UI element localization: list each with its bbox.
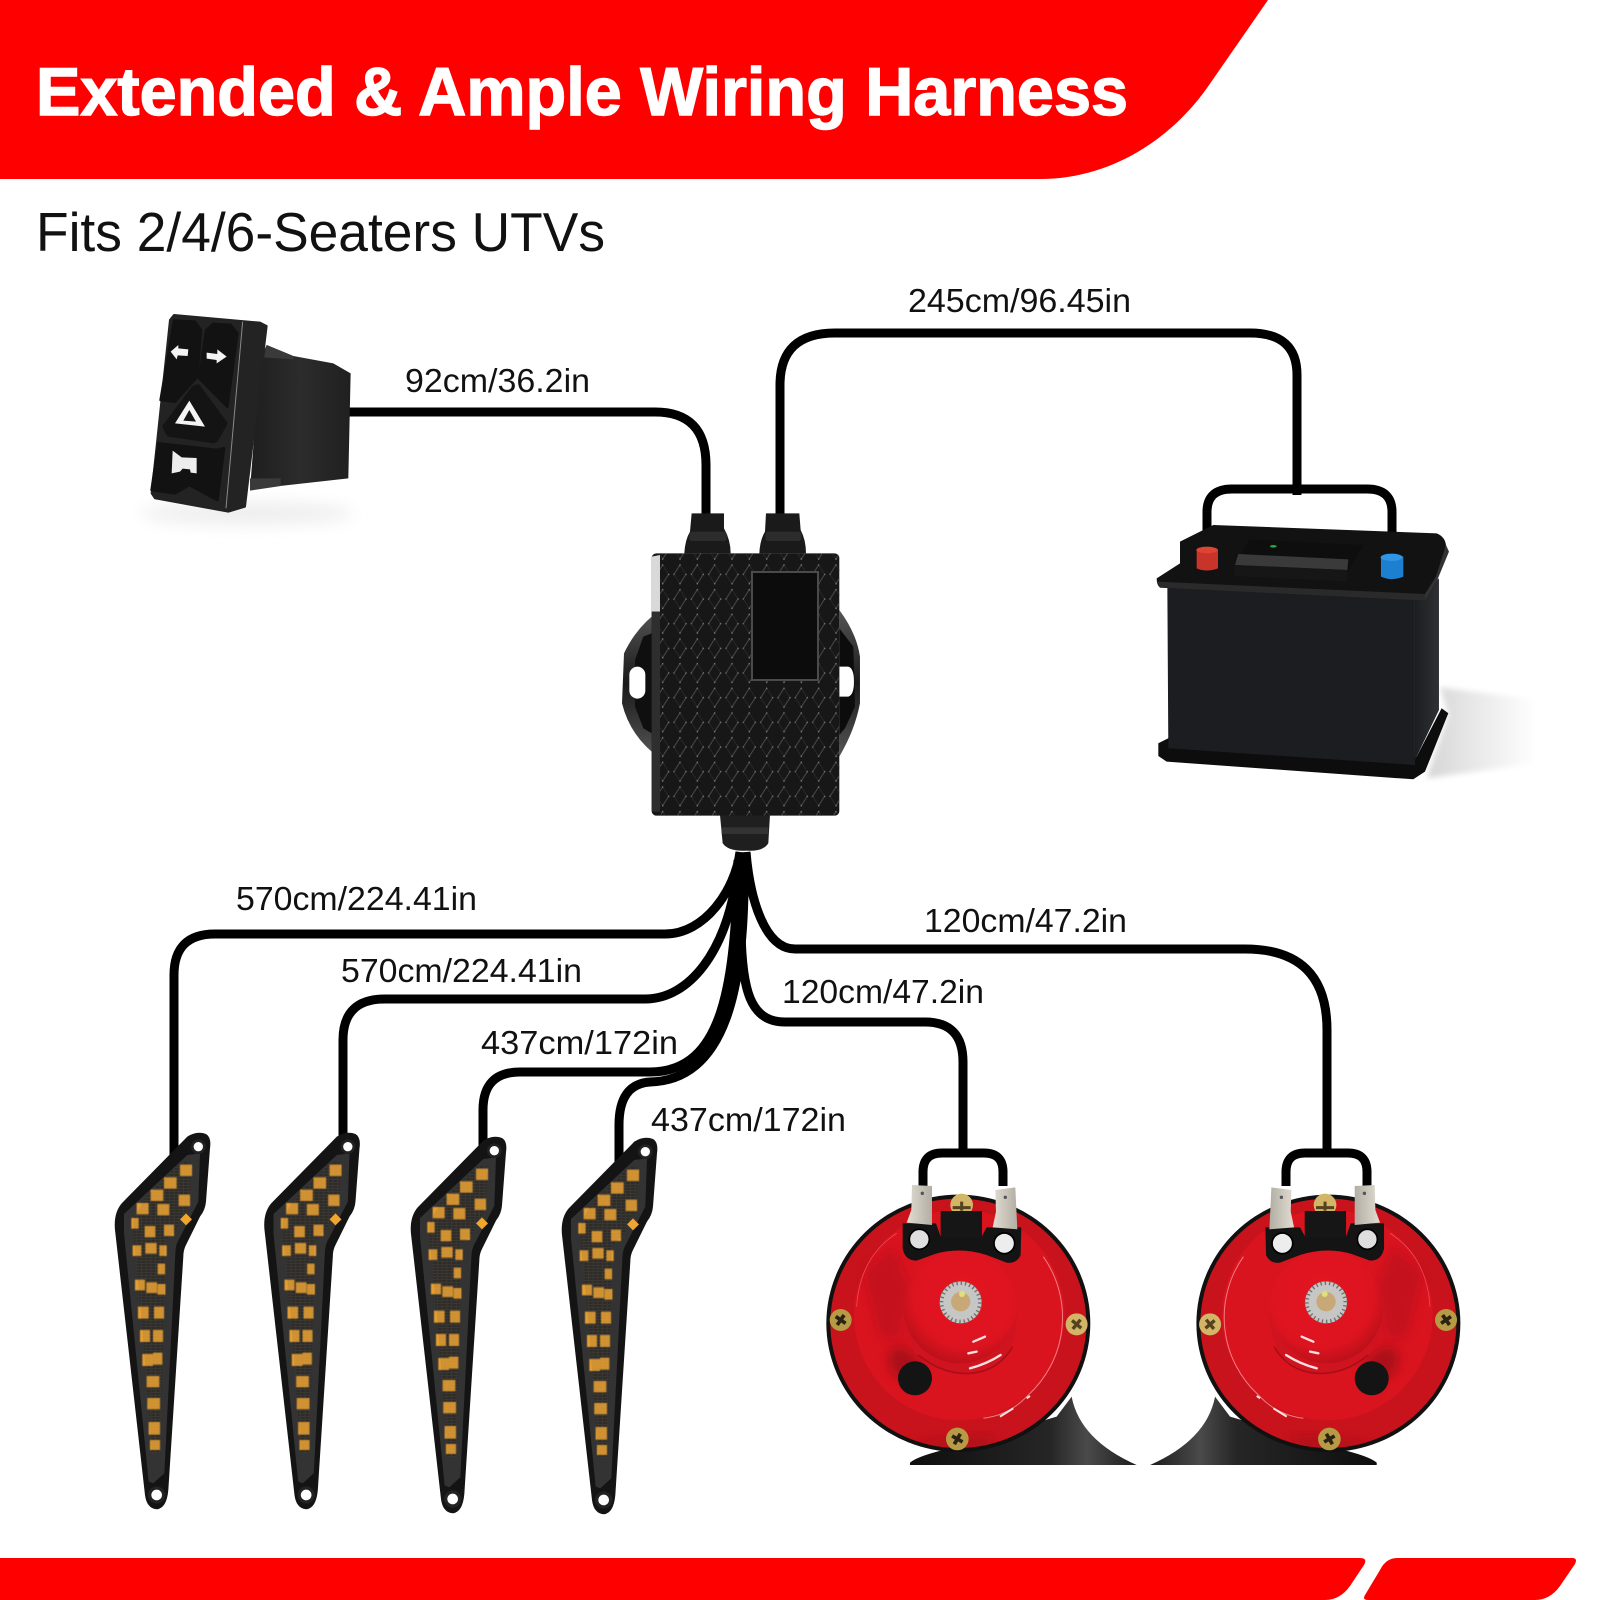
icon: light 1 [115,1133,210,1509]
wire: light 1 [174,852,740,1155]
wire: controller to battery [780,333,1297,525]
icon: horn 1 [826,1185,1137,1465]
subtitle: Fits 2/4/6-Seaters UTVs [36,201,605,263]
body [652,553,839,816]
label: switch wire: 92cm/36.2in [405,362,590,399]
label: light 3 wire: 437cm/172in [481,1024,678,1061]
title: Extended & Ample Wiring Harness [36,54,1128,130]
label: light 4 wire: 437cm/172in [651,1101,846,1138]
label: light 2 wire: 570cm/224.41in [341,952,582,989]
label: horn 2 wire: 120cm/47.2in [924,902,1127,939]
header banner [0,0,1268,179]
wire: battery fork [1207,489,1392,555]
wire: switch to controller [345,412,706,525]
icon: light 3 [411,1137,506,1513]
wire: light 3 [483,860,738,1155]
wiring harness [174,333,1392,1186]
icon: horn 2 [1150,1185,1460,1465]
icon: battery [1157,525,1537,779]
display window [752,572,818,680]
connectors [684,513,731,553]
wire: horn 1 [741,930,963,1155]
icon: control box [622,513,860,851]
wire: light 2 [343,880,736,1155]
footer bar [0,1558,1365,1600]
label: battery wire: 245cm/96.45in [908,282,1131,319]
label: horn 1 wire: 120cm/47.2in [782,973,984,1010]
icon: control switch [140,315,353,525]
battery terminals [1197,547,1218,570]
mounting ears [622,610,660,758]
wire: light 4 [619,860,744,1170]
label: light 1 wire: 570cm/224.41in [236,880,477,917]
wire: horn 2 fork [1286,1153,1367,1186]
icon: light 4 [562,1138,657,1514]
footer accent [1364,1558,1576,1600]
wire: horn 1 fork [923,1153,1003,1186]
icon: light 2 [264,1133,360,1509]
wire: horn 2 [746,852,1327,1155]
